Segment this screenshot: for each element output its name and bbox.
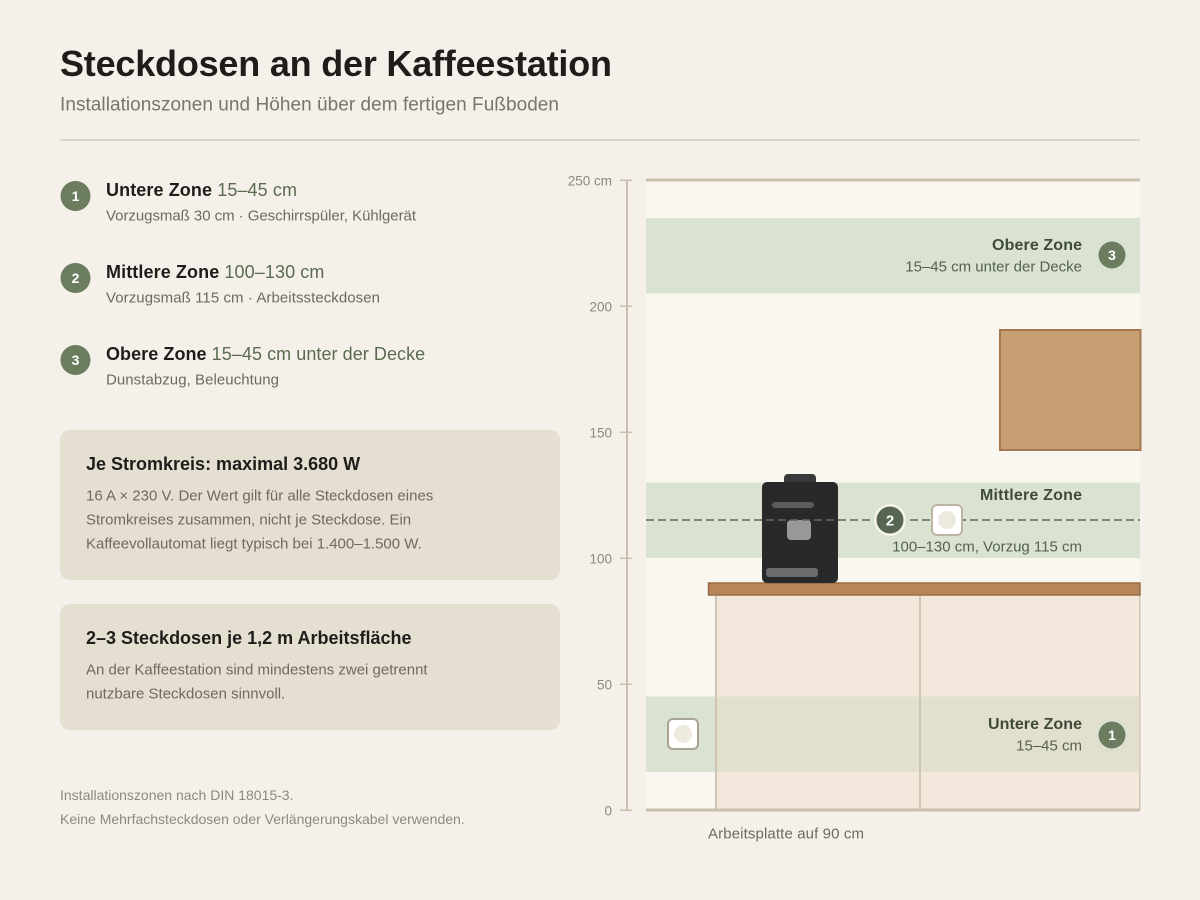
band: middle zone [646, 482, 1140, 558]
badge 3 [60, 345, 90, 375]
label: lower zone [988, 716, 1082, 754]
ceiling line [646, 178, 1140, 182]
badge 3: 3 [72, 352, 80, 368]
badge 2 [60, 263, 90, 293]
height axis [568, 174, 632, 818]
height axis: 0 [604, 804, 612, 818]
dashed line: preferred height 115 cm [646, 519, 1140, 521]
subtitle: Installationszonen und Höhen über dem fertigen Fußboden [60, 94, 559, 116]
footnote: Keine Mehrfachsteckdosen oder Verlängerungskabel verwenden. [60, 811, 465, 827]
panel: socket count [60, 604, 560, 730]
coffee machine [762, 474, 838, 583]
panel text: circuit load: Kaffeevollautomat liegt typisch bei 1.400–1.500 W. [86, 536, 422, 552]
marker 3: 3 [1108, 247, 1116, 263]
band: upper zone [646, 218, 1140, 294]
badge 1: 1 [72, 188, 80, 204]
panel text: circuit load: 16 A × 230 V. Der Wert gilt für alle Steckdosen eines [86, 488, 433, 504]
zone item 1 [60, 180, 417, 224]
label: middle zone: 100–130 cm, Vorzug 115 cm [892, 538, 1082, 556]
socket: lower zone [668, 719, 698, 749]
zone 2 detail: Vorzugsmaß 115 cm · Arbeitssteckdosen [106, 290, 380, 306]
band: lower zone [646, 696, 1140, 772]
worktop [708, 583, 1140, 595]
label: lower zone: Untere Zone [988, 716, 1082, 733]
marker 3 [1096, 240, 1128, 270]
socket: middle zone [932, 505, 962, 535]
marker 1 [1096, 720, 1128, 750]
worktop height caption: Arbeitsplatte auf 90 cm [708, 826, 864, 842]
marker 2 [874, 504, 906, 536]
panel text: socket count: nutzbare Steckdosen sinnvoll. [86, 686, 285, 702]
label: middle zone [892, 487, 1082, 556]
height axis: 250 cm [568, 174, 612, 188]
label: middle zone: Mittlere Zone [980, 487, 1082, 504]
height axis: 150 [589, 426, 612, 440]
marker 2: 2 [886, 512, 894, 530]
title: Steckdosen an der Kaffeestation [60, 43, 612, 84]
height axis: 200 [589, 300, 612, 314]
base cabinets [715, 595, 1140, 810]
badge 1 [60, 181, 90, 211]
label: upper zone: Obere Zone [992, 237, 1082, 254]
floor line [646, 808, 1140, 812]
label: upper zone [905, 237, 1082, 276]
marker 1: 1 [1108, 727, 1116, 743]
panel heading: socket count: 2–3 Steckdosen je 1,2 m Arbeitsfläche [86, 628, 412, 648]
wall elevation [646, 178, 1140, 812]
label: lower zone: 15–45 cm [1016, 738, 1082, 754]
zone 1 detail: Vorzugsmaß 30 cm · Geschirrspüler, Kühlgerät [106, 208, 417, 224]
zone 3 heading: Obere Zone 15–45 cm unter der Decke [106, 344, 425, 364]
zone item 2 [60, 262, 380, 306]
panel heading: circuit load: Je Stromkreis: maximal 3.680 W [86, 454, 360, 474]
panel text: socket count: An der Kaffeestation sind mindestens zwei getrennt [86, 662, 428, 678]
height axis: 50 [597, 678, 612, 692]
zone item 3 [60, 344, 425, 388]
zone 3 detail: Dunstabzug, Beleuchtung [106, 372, 279, 388]
panel text: circuit load: Stromkreises zusammen, nicht je Steckdose. Ein [86, 512, 411, 528]
zone 2 heading: Mittlere Zone 100–130 cm [106, 262, 324, 282]
height axis: 100 [589, 552, 612, 566]
footnote: Installationszonen nach DIN 18015-3. [60, 787, 293, 803]
label: upper zone: 15–45 cm unter der Decke [905, 258, 1082, 276]
zone 1 heading: Untere Zone 15–45 cm [106, 180, 297, 200]
wall cabinet [1000, 330, 1140, 450]
panel: circuit load [60, 430, 560, 580]
badge 2: 2 [72, 270, 80, 286]
